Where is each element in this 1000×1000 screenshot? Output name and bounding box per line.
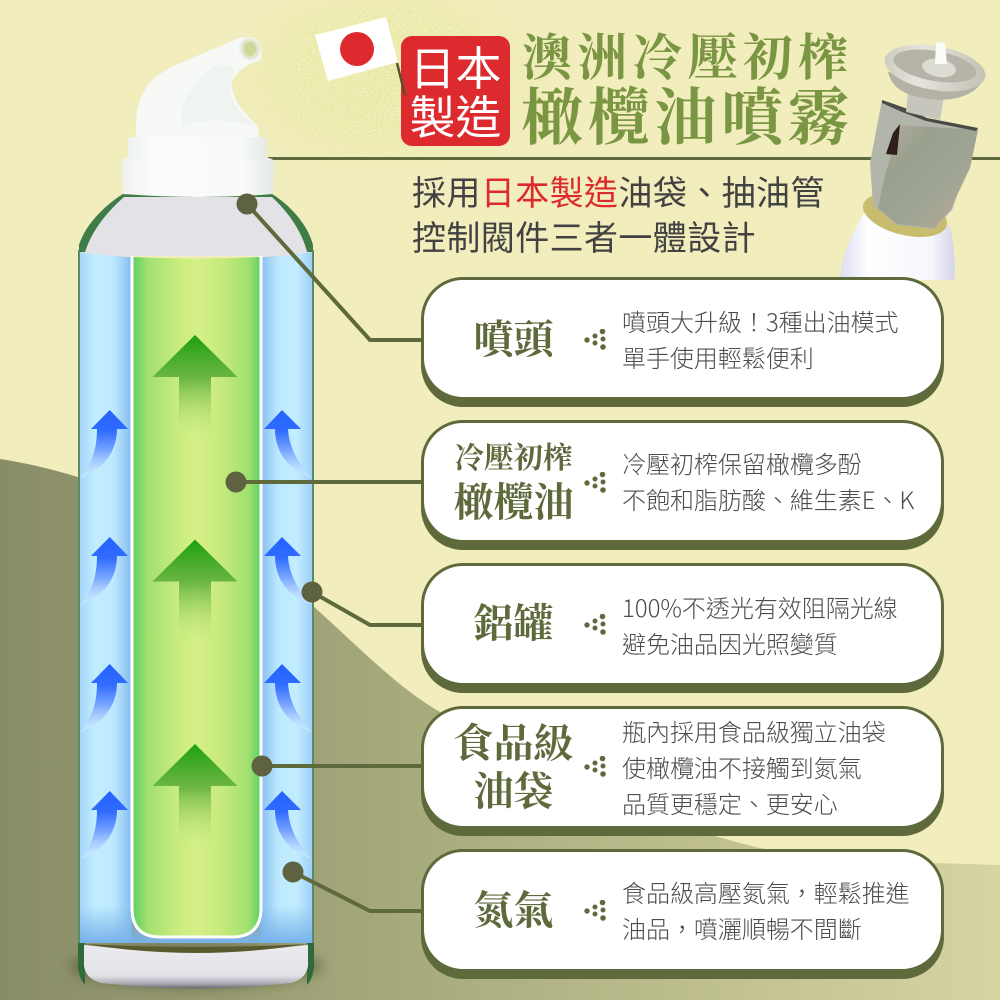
icon: dots — [584, 614, 606, 635]
description: food-grade bag: 品質更穩定、更安心 — [622, 785, 838, 820]
flag cloth — [315, 17, 398, 81]
bottle ground shadow — [70, 944, 322, 988]
description: food-grade bag — [622, 713, 886, 820]
description: aluminium can: 避免油品因光照變質 — [622, 625, 838, 660]
valve cup underside — [888, 72, 983, 100]
description: olive oil: 不飽和脂肪酸、維生素E、K — [622, 481, 914, 516]
subtitle line 2: 控制閥件三者一體設計 — [412, 211, 756, 260]
heading: olive oil line 2: 橄欖油 — [454, 480, 574, 525]
description: olive oil: 冷壓初榨保留橄欖多酚 — [622, 445, 862, 480]
description: nozzle: 單手使用輕鬆便利 — [622, 339, 814, 374]
badge text: 日本 — [410, 33, 502, 99]
green arrow bottom — [152, 744, 238, 851]
title line 1: 澳洲冷壓初榨 — [522, 30, 853, 86]
bottle side outline — [78, 250, 314, 944]
flag pole — [397, 63, 405, 95]
heading: food-grade bag line 2: 油袋 — [474, 769, 554, 814]
description: nitrogen: 食品級高壓氮氣，輕鬆推進 — [622, 874, 910, 909]
icon: dots — [584, 472, 606, 493]
badge text: 製造 — [410, 82, 502, 148]
description: food-grade bag: 瓶內採用食品級獨立油袋 — [622, 713, 886, 748]
blue chamber bottom — [80, 905, 312, 943]
connector: oil — [236, 480, 424, 484]
green arrow top — [152, 335, 238, 442]
connector: bag — [262, 764, 424, 768]
bottle — [70, 35, 322, 989]
nozzle — [136, 37, 262, 137]
description: nozzle — [622, 303, 898, 374]
flag of Japan — [315, 17, 398, 81]
neck — [906, 92, 944, 120]
description: olive oil — [622, 445, 914, 516]
divider line — [268, 157, 1000, 160]
icon: dots — [584, 329, 606, 350]
pouch front — [878, 125, 978, 228]
pouch back — [870, 100, 978, 229]
badge text — [410, 33, 502, 148]
description: food-grade bag: 使橄欖油不接觸到氮氣 — [622, 749, 862, 784]
valve boss — [921, 56, 957, 80]
card: nozzle — [421, 277, 944, 400]
background hill — [0, 459, 1000, 1000]
valve cup inner — [891, 44, 979, 88]
cap collar — [128, 137, 267, 159]
blue arrows right — [264, 410, 312, 859]
product photo: pouch and valve — [840, 37, 989, 280]
valve cup rim — [881, 37, 989, 99]
spray mist — [232, 0, 538, 172]
card: nitrogen — [421, 849, 944, 972]
gold ring — [858, 185, 952, 245]
bottle shoulder — [79, 194, 313, 252]
card: aluminium can — [421, 563, 944, 686]
blue arrows left — [80, 410, 128, 859]
description: nitrogen — [622, 874, 910, 945]
card: olive oil — [421, 420, 944, 543]
red badge — [401, 36, 510, 146]
heading: olive oil: 冷壓初榨 — [454, 443, 572, 475]
description: nozzle: 噴頭大升級！3種出油模式 — [622, 303, 898, 338]
pouch rim — [882, 100, 978, 131]
blue chamber left — [80, 252, 132, 943]
can body — [840, 210, 955, 280]
green oil bag — [132, 257, 261, 937]
connector: can — [312, 592, 424, 625]
heading: nozzle: 噴頭 — [474, 317, 554, 362]
flag sun — [340, 32, 374, 66]
title line 2: 橄欖油噴霧 — [521, 85, 855, 153]
card: food-grade bag — [421, 706, 944, 829]
bottle base — [78, 943, 314, 985]
heading: nitrogen: 氮氣 — [474, 888, 554, 933]
description: nitrogen: 油品，噴灑順暢不間斷 — [622, 910, 862, 945]
connector dots — [226, 194, 322, 882]
connector: nitrogen — [293, 872, 424, 911]
green arrow middle — [152, 540, 238, 646]
connector: nozzle — [247, 204, 424, 340]
green oil bag border — [132, 256, 261, 937]
pouch slit — [886, 124, 900, 155]
subtitle line 1: 採用日本製造油袋、抽油管 — [412, 166, 825, 215]
icon: dots — [584, 900, 606, 921]
description: aluminium can — [622, 589, 898, 660]
cap — [122, 158, 274, 197]
description: aluminium can: 100%不透光有效阻隔光線 — [622, 589, 898, 624]
icon: dots — [584, 756, 606, 777]
heading: food-grade bag: 食品級 — [454, 721, 574, 766]
valve stem — [935, 42, 947, 64]
blue chamber right — [260, 252, 312, 943]
heading: aluminium can: 鋁罐 — [474, 601, 554, 646]
